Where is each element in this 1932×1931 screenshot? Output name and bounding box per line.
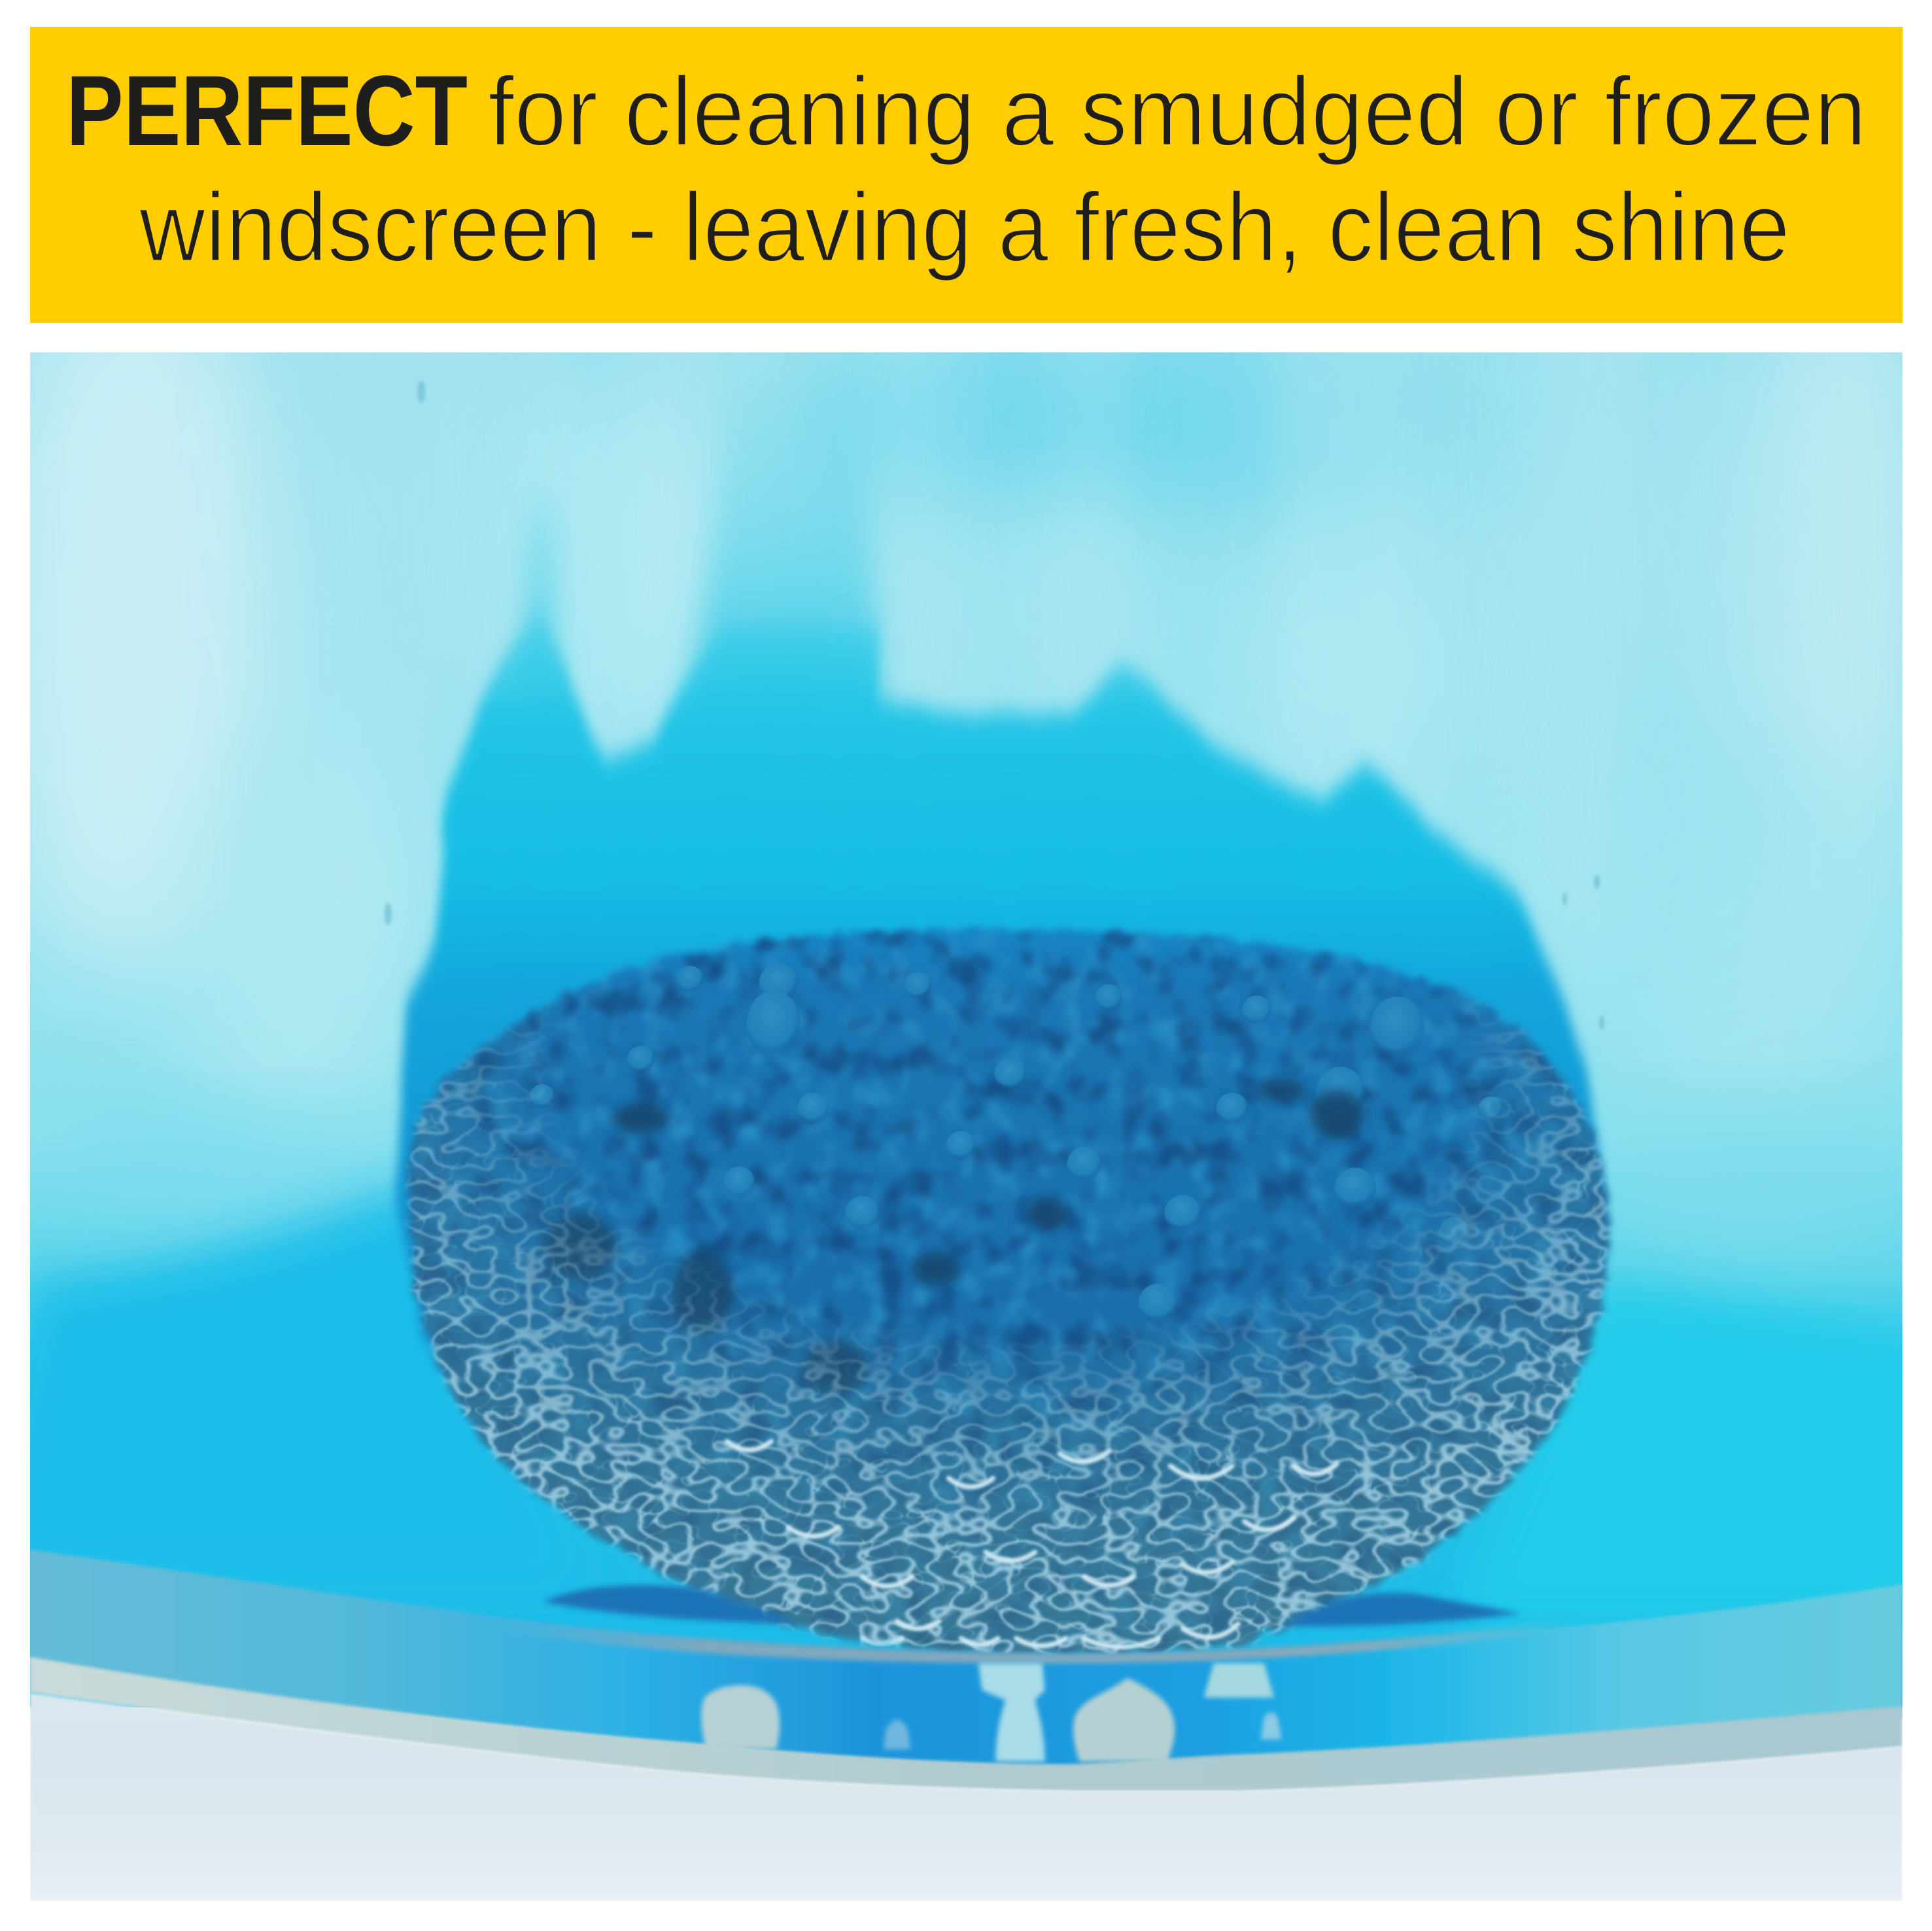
white surface below bbox=[29, 1692, 1903, 1901]
bright droplets at base bbox=[727, 1441, 1337, 1647]
grey rim line bbox=[493, 1616, 1577, 1664]
tablet bubbling mass bbox=[357, 887, 1663, 1675]
small peg bbox=[884, 1720, 910, 1749]
bright water pool right bbox=[1454, 1281, 1932, 1626]
water background bbox=[29, 352, 1903, 1707]
small peg right bbox=[1260, 1713, 1281, 1739]
grey-green lower rim bbox=[29, 1657, 1903, 1791]
light and mid-tone haze bbox=[0, 271, 1932, 1250]
lighter mottling bbox=[357, 887, 1663, 1675]
faint upper plume streaks bbox=[523, 382, 882, 739]
tablet base shadows bbox=[542, 1585, 1522, 1626]
heading banner bbox=[30, 27, 1903, 323]
peg 4 bbox=[1204, 1663, 1274, 1698]
bubbles bbox=[530, 963, 1503, 1323]
drifting specks bbox=[385, 381, 1604, 1030]
saturated blue dissolving plume bbox=[397, 610, 1608, 1524]
silvery lower tone bbox=[370, 912, 1651, 1675]
peg 1 bbox=[701, 1685, 780, 1749]
blue container band bbox=[29, 1550, 1903, 1769]
tablet body bbox=[357, 887, 1663, 1675]
moulded pegs bbox=[701, 1663, 1281, 1762]
heading line 1: for cleaning a smudged or frozen bbox=[488, 56, 1867, 166]
silver squiggle texture bbox=[370, 912, 1651, 1675]
bright water pool left bbox=[0, 1183, 591, 1589]
heading line 1: PERFECT bbox=[66, 55, 468, 167]
banner background bbox=[30, 27, 1903, 323]
peg 2 bbox=[978, 1663, 1045, 1762]
heading line 2: windscreen - leaving a fresh, clean shine bbox=[139, 172, 1790, 282]
vertical streaks bbox=[570, 352, 1771, 822]
dark mottling bbox=[357, 887, 1663, 1675]
dark hollows bbox=[542, 1079, 1364, 1395]
peg 3 bbox=[1073, 1678, 1175, 1762]
